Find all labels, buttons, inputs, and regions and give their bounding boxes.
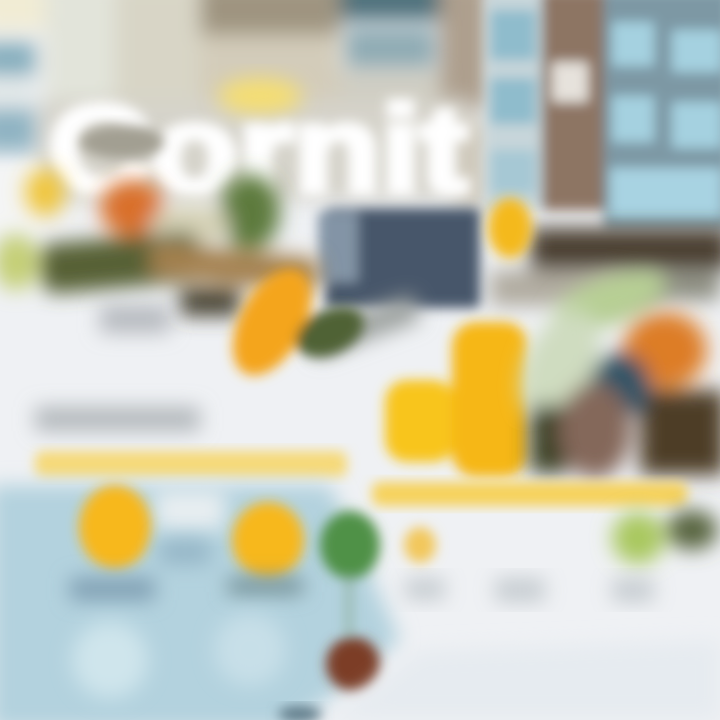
white gap above panel — [155, 490, 225, 530]
yellow coin beside building — [488, 198, 532, 258]
lower-left blue panel — [0, 485, 400, 720]
large blurred heading: Cornit — [48, 81, 468, 219]
white ground below heading at left — [0, 165, 40, 235]
top background: shelves — [0, 0, 490, 210]
bottom dark accent — [278, 706, 322, 720]
faint circles in panel — [72, 614, 286, 698]
yellow circles — [79, 485, 304, 578]
right produce heap — [505, 257, 720, 478]
bottom-right pale floor — [330, 640, 720, 720]
dark band under building — [490, 228, 720, 306]
circle captions — [70, 540, 303, 600]
central orange corn — [217, 256, 372, 388]
lower-right faint columns — [405, 578, 654, 602]
heading grey infill — [80, 125, 164, 159]
navy box — [318, 208, 480, 308]
left yellow banner — [35, 451, 347, 477]
right yellow banner — [372, 482, 687, 506]
small green item at right — [612, 510, 718, 564]
building with blue windows — [485, 0, 720, 230]
yellow label on shelf — [218, 78, 302, 114]
left produce row — [0, 168, 421, 358]
small text blocks — [35, 305, 200, 431]
plant in pot — [320, 511, 436, 691]
coin stack — [385, 322, 528, 477]
